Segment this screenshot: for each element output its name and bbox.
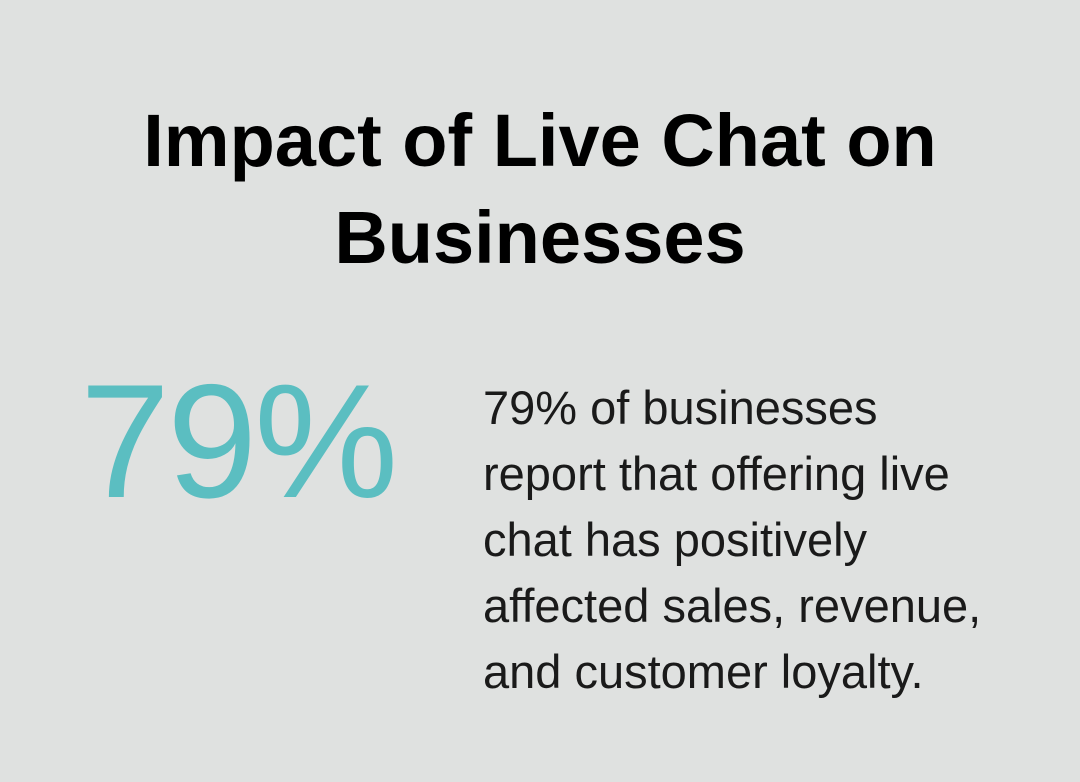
description text: chat has positively [483, 513, 867, 566]
big stat: 79%: 79% [80, 351, 395, 532]
description text: report that offering live [483, 447, 950, 500]
description text [483, 381, 981, 698]
title [143, 99, 937, 279]
title: Businesses [334, 196, 746, 279]
title: Impact of Live Chat on [143, 99, 937, 182]
description text: 79% of businesses [483, 381, 878, 434]
description text: affected sales, revenue, [483, 579, 981, 632]
description text: and customer loyalty. [483, 645, 924, 698]
